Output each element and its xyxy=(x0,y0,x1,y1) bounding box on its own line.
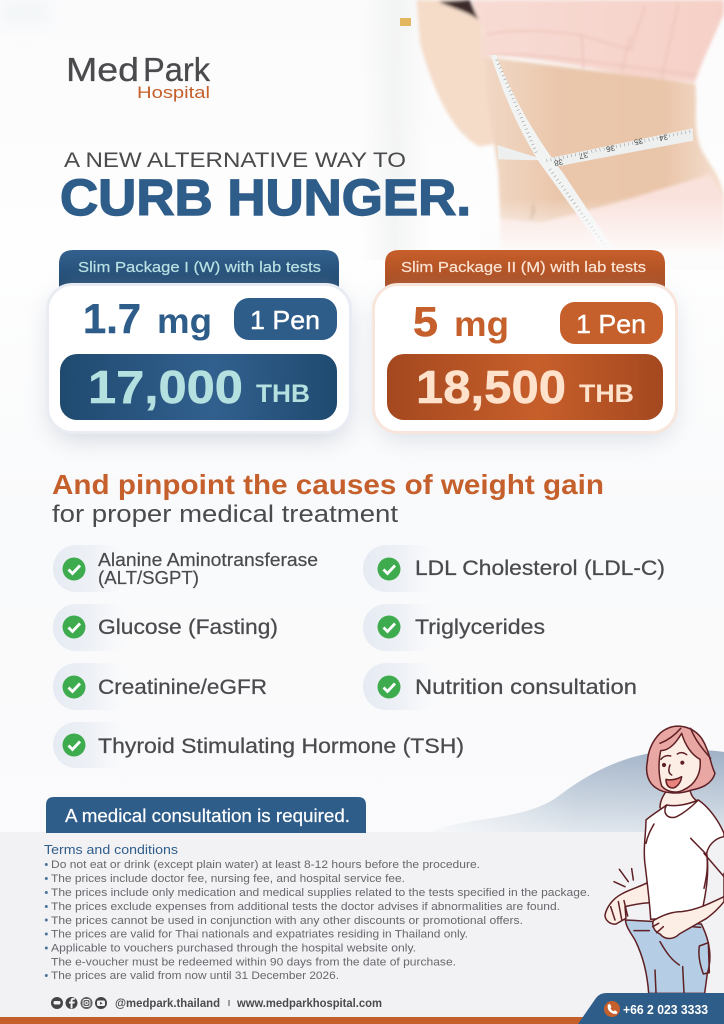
callout: consultation required xyxy=(46,797,366,833)
terms and conditions: The prices are valid from now until 31 December 2026. xyxy=(51,970,339,982)
panel: slim package I: mg xyxy=(157,302,212,341)
terms and conditions: The prices include only medication and medical supplies related to the tests specified in the package. xyxy=(51,887,590,899)
panel: slim package II: 5 xyxy=(413,298,438,345)
test item: LDL xyxy=(363,545,665,592)
panel: terms background xyxy=(0,832,724,1024)
social handle and website xyxy=(115,996,382,1010)
test item: glucose: Glucose (Fasting) xyxy=(98,616,278,639)
panel: slim package I: 1 Pen xyxy=(250,305,320,335)
terms and conditions: The e-voucher must be redeemed within 90 days from the date of purchase. xyxy=(51,956,456,968)
hero photo: woman measuring waist: 36 xyxy=(605,143,616,154)
heading: causes of weight gain: for proper medical treatment xyxy=(52,501,398,528)
test item: nutrition: Nutrition consultation xyxy=(415,676,637,699)
panel: slim package I: THB xyxy=(256,380,310,408)
heading: causes of weight gain xyxy=(52,469,604,528)
test item: ALT/SGPT xyxy=(53,545,318,592)
logo: Hospital xyxy=(137,83,210,102)
panel: slim package I: 1.7 xyxy=(83,295,141,342)
hero photo: woman measuring waist xyxy=(0,0,724,270)
illustration: woman in oversized jeans xyxy=(605,726,724,993)
panel: slim package I: 17,000 xyxy=(88,361,243,413)
panel: slim package II: Slim Package II (M) with lab tests xyxy=(401,260,646,276)
test item: triglycerides: Triglycerides xyxy=(415,616,545,639)
callout: consultation required: A medical consultation is required. xyxy=(65,806,350,826)
panel: slim package II: THB xyxy=(579,380,634,408)
panel: slim package II: 1 Pen xyxy=(576,309,646,339)
hero photo: woman measuring waist: 35 xyxy=(633,136,644,147)
decorative wave xyxy=(428,750,724,833)
test item: ALT/SGPT: (ALT/SGPT) xyxy=(98,568,199,588)
test item: nutrition xyxy=(363,663,637,710)
social icons xyxy=(51,997,107,1009)
phone tab xyxy=(578,993,724,1024)
terms and conditions: Do not eat or drink (except plain water) at least 8-12 hours before the procedure. xyxy=(51,859,480,871)
test item: TSH xyxy=(53,722,464,768)
phone tab: +66 2 023 3333 xyxy=(623,1002,708,1017)
social handle and website: www.medparkhospital.com xyxy=(236,996,382,1010)
test item: creatinine: Creatinine/eGFR xyxy=(98,676,267,699)
terms and conditions: Applicable to vouchers purchased through the hospital website only. xyxy=(51,942,416,954)
social handle and website: @medpark.thailand xyxy=(115,996,220,1010)
panel: slim package I: Slim Package I (W) with lab tests xyxy=(78,260,321,276)
terms and conditions: The prices are valid for Thai nationals and expatriates residing in Thailand only. xyxy=(51,928,468,940)
logo xyxy=(66,51,210,102)
title: A NEW ALTERNATIVE WAY TO xyxy=(64,149,406,172)
logo: Med xyxy=(66,51,139,88)
test item: ALT/SGPT: Alanine Aminotransferase xyxy=(98,550,318,570)
test item: glucose xyxy=(53,604,278,651)
terms and conditions: The prices include doctor fee, nursing fee, and hospital service fee. xyxy=(51,873,405,885)
test item: triglycerides xyxy=(363,604,545,651)
hero photo: woman measuring waist: 38 xyxy=(553,157,564,168)
title: CURB HUNGER. xyxy=(60,169,471,226)
hero photo: woman measuring waist: 34 xyxy=(658,132,669,143)
hero photo: woman measuring waist: 37 xyxy=(578,150,589,161)
terms and conditions: The prices exclude expenses from additional tests the doctor advises if abnormalities are found. xyxy=(51,901,560,913)
test item: TSH: Thyroid Stimulating Hormone (TSH) xyxy=(98,735,464,758)
terms and conditions: The prices cannot be used in conjunction with any other discounts or promotional offers. xyxy=(51,915,523,927)
panel: slim package II xyxy=(374,250,676,440)
panel: slim package I xyxy=(48,250,350,440)
terms and conditions xyxy=(44,842,590,982)
panel: slim package II: mg xyxy=(454,305,509,344)
footer strip xyxy=(0,1017,724,1024)
test item: creatinine xyxy=(53,663,267,710)
panel: slim package II: 18,500 xyxy=(416,361,566,413)
terms and conditions: Terms and conditions xyxy=(44,842,179,857)
heading: causes of weight gain: And pinpoint the causes of weight gain xyxy=(52,469,604,500)
test item: LDL: LDL Cholesterol (LDL-C) xyxy=(415,557,665,580)
logo: Park xyxy=(143,51,210,88)
